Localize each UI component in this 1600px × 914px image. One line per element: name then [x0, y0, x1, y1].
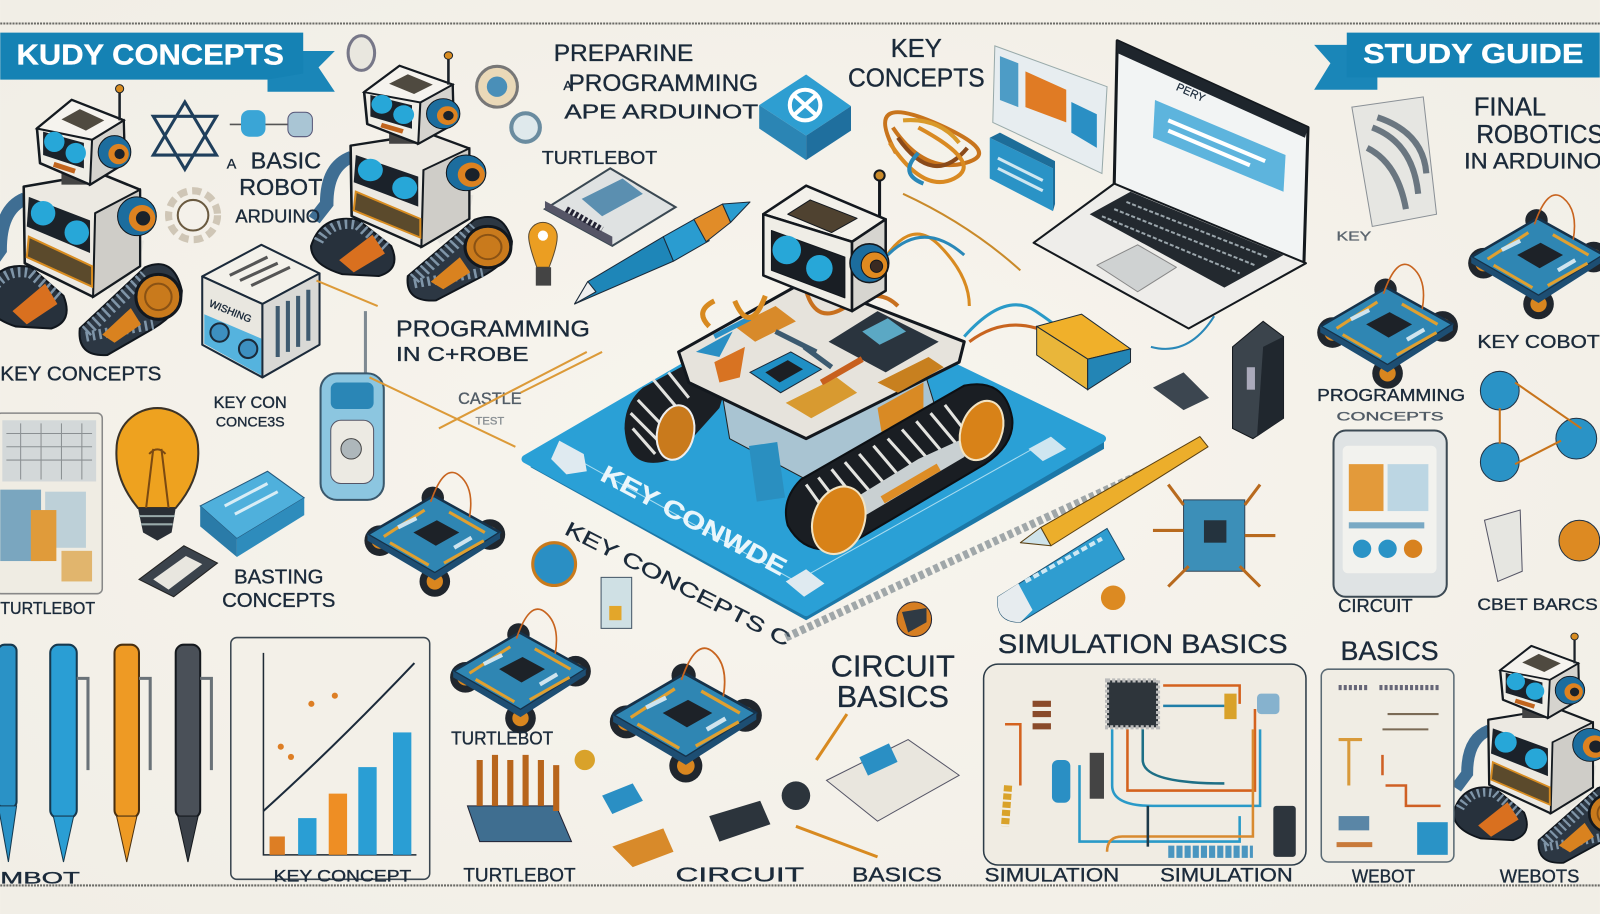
- platform text: KEY CONWDE: [596, 461, 791, 581]
- label: key concepts top: [848, 35, 985, 93]
- label: final robotics in arduino: [1464, 93, 1600, 173]
- robot: top left: [0, 85, 182, 355]
- label: turtlebot: TURTLEBOT: [542, 147, 657, 168]
- label: programming: PROGRAMMING: [396, 316, 590, 342]
- label: preparine programming: [554, 40, 758, 123]
- label: programming right: CONCEPTS: [1337, 409, 1444, 423]
- panel: simulation circuit: [984, 664, 1306, 886]
- label: key con concepts: KEY CON: [214, 394, 287, 412]
- label: preparine programming: APE ARDUINOT: [564, 101, 758, 123]
- panel: screen document: [993, 46, 1107, 173]
- label: turtlebot left: TURTLEBOT: [0, 598, 95, 618]
- label: circuit basics large: CIRCUIT: [831, 649, 955, 683]
- label: a basic robot arduino: ARDUINO: [235, 205, 320, 226]
- icon: small ring: [348, 36, 375, 70]
- banner: study guide: STUDY GUIDE: [1363, 38, 1583, 69]
- board: [679, 281, 964, 439]
- label: a basic robot arduino: BASIC: [251, 147, 321, 173]
- icon: blue capsule: [998, 528, 1124, 622]
- wires: [703, 194, 1071, 342]
- panel: bar chart: KEY CONCEPT: [274, 867, 411, 885]
- label: key small: KEY: [1337, 229, 1371, 244]
- icon: small device: [139, 546, 218, 597]
- icon: ring marker: [511, 113, 540, 142]
- icon: yellow module: [1037, 314, 1131, 390]
- icon: small bulb: [529, 222, 557, 286]
- rover: bottom b: [610, 648, 762, 782]
- panel: simulation circuit: SIMULATION: [985, 864, 1119, 886]
- main robot: [625, 170, 1071, 562]
- label: basting concepts: BASTING: [234, 566, 323, 588]
- icon: module box: [990, 133, 1055, 211]
- icon: notebook: [545, 168, 676, 246]
- icon: lightbulb: [116, 408, 198, 541]
- label: preparine programming: PREPARINE: [554, 40, 693, 67]
- icon: ball and meter: [533, 543, 632, 628]
- panel: tablet: [1334, 430, 1447, 597]
- platform: [526, 296, 1104, 620]
- decorative: angled small text line: [786, 459, 1173, 638]
- label: key con concepts: CONCE3S: [216, 414, 285, 430]
- label: key cobot: KEY COBOT: [1477, 331, 1600, 352]
- rover: bottom a: [450, 609, 591, 733]
- label: programming: TEST: [476, 415, 504, 427]
- label: circuit: CIRCUIT: [676, 864, 804, 886]
- icon: pen: [575, 202, 750, 304]
- icon: blue box: [759, 74, 851, 160]
- label: circuit: CIRCUIT: [1338, 595, 1413, 616]
- icon: round medal: [477, 66, 517, 107]
- icon: wire bundle: [885, 112, 979, 184]
- label: circuit basics large: BASICS: [837, 680, 949, 714]
- head: [763, 170, 889, 311]
- label: turtlebot lower: TURTLEBOT: [463, 864, 576, 886]
- label: mbot: MBOT: [0, 869, 80, 887]
- label: webots: WEBOTS: [1500, 865, 1579, 886]
- label: basting concepts: [222, 566, 335, 612]
- rover: right a: [1317, 264, 1458, 389]
- icons: round sensors: [1480, 371, 1600, 581]
- icon: connector rack: [467, 755, 572, 842]
- robot: top second: [311, 52, 512, 301]
- left panel: dashboard board: [0, 413, 102, 594]
- icon: circuit parts: [575, 714, 959, 867]
- banner: kudy concepts: [0, 33, 335, 92]
- front track: [786, 384, 1012, 562]
- icon: laptop: [1034, 41, 1308, 328]
- icon: small knob: [897, 586, 1125, 637]
- panel: webot sheet: [1321, 669, 1454, 862]
- icon: circuit block: [1153, 485, 1275, 587]
- icon: dark sensor: [1233, 321, 1284, 439]
- label: key con concepts: [214, 394, 287, 430]
- label: key concepts angled: KEY CONCEPTS C: [561, 518, 794, 651]
- label: programming: IN C+ROBE: [396, 344, 529, 366]
- lower chassis: [719, 352, 939, 479]
- label: key concepts top: KEY: [891, 35, 942, 63]
- label: basting concepts: CONCEPTS: [222, 590, 335, 612]
- panel: simulation circuit: SIMULATION: [1160, 864, 1293, 886]
- icon: cube: WISHING: [207, 299, 253, 326]
- label: preparine programming: A: [563, 78, 572, 93]
- label: programming right: [1317, 385, 1465, 423]
- icon: cube: [202, 245, 320, 377]
- icon: code page: [1352, 97, 1437, 226]
- label: a basic robot arduino: [227, 147, 322, 226]
- label: webot: WEBOT: [1352, 865, 1415, 886]
- icon: remote: [321, 311, 384, 500]
- label: final robotics in arduino: FINAL: [1474, 93, 1546, 121]
- rover: centre left: [364, 472, 505, 597]
- icon: laptop: PERY: [1174, 82, 1207, 105]
- banner: kudy concepts: KUDY CONCEPTS: [17, 39, 284, 71]
- label: a basic robot arduino: ROBOT: [239, 174, 322, 200]
- rear track: [625, 352, 725, 463]
- icon: star: [153, 102, 217, 169]
- label: basics right: BASICS: [1341, 636, 1439, 666]
- rover: right b: [1468, 195, 1600, 319]
- icon: connected nodes: [230, 110, 312, 137]
- icon: blue chip box: [200, 471, 304, 557]
- label: key concepts left: KEY CONCEPTS: [0, 363, 161, 385]
- label: circuit basics large: [831, 649, 955, 714]
- icon: yellow pencil: [1020, 437, 1208, 546]
- robot: bottom right: [1453, 633, 1600, 863]
- panel: bar chart: [231, 638, 430, 885]
- label: programming right: PROGRAMMING: [1317, 385, 1465, 405]
- label: final robotics in arduino: IN ARDUINO: [1464, 148, 1600, 173]
- banner: study guide: [1314, 33, 1600, 90]
- label: preparine programming: PROGRAMMING: [568, 70, 758, 97]
- icon: small connector: [1151, 316, 1214, 410]
- label: turtlebot upper: TURTLEBOT: [451, 728, 553, 749]
- pens: [0, 645, 211, 862]
- label: programming: [396, 316, 590, 427]
- label: cbet barcs: CBET BARCS: [1477, 596, 1598, 614]
- decorative: orange lines: [316, 281, 602, 447]
- label: basics: BASICS: [852, 864, 942, 886]
- label: a basic robot arduino: A: [227, 156, 237, 172]
- label: programming: CASTLE: [458, 390, 522, 408]
- icon: gear: [169, 191, 218, 240]
- label: key concepts top: CONCEPTS: [848, 65, 985, 93]
- label: simulation basics: SIMULATION BASICS: [998, 629, 1288, 659]
